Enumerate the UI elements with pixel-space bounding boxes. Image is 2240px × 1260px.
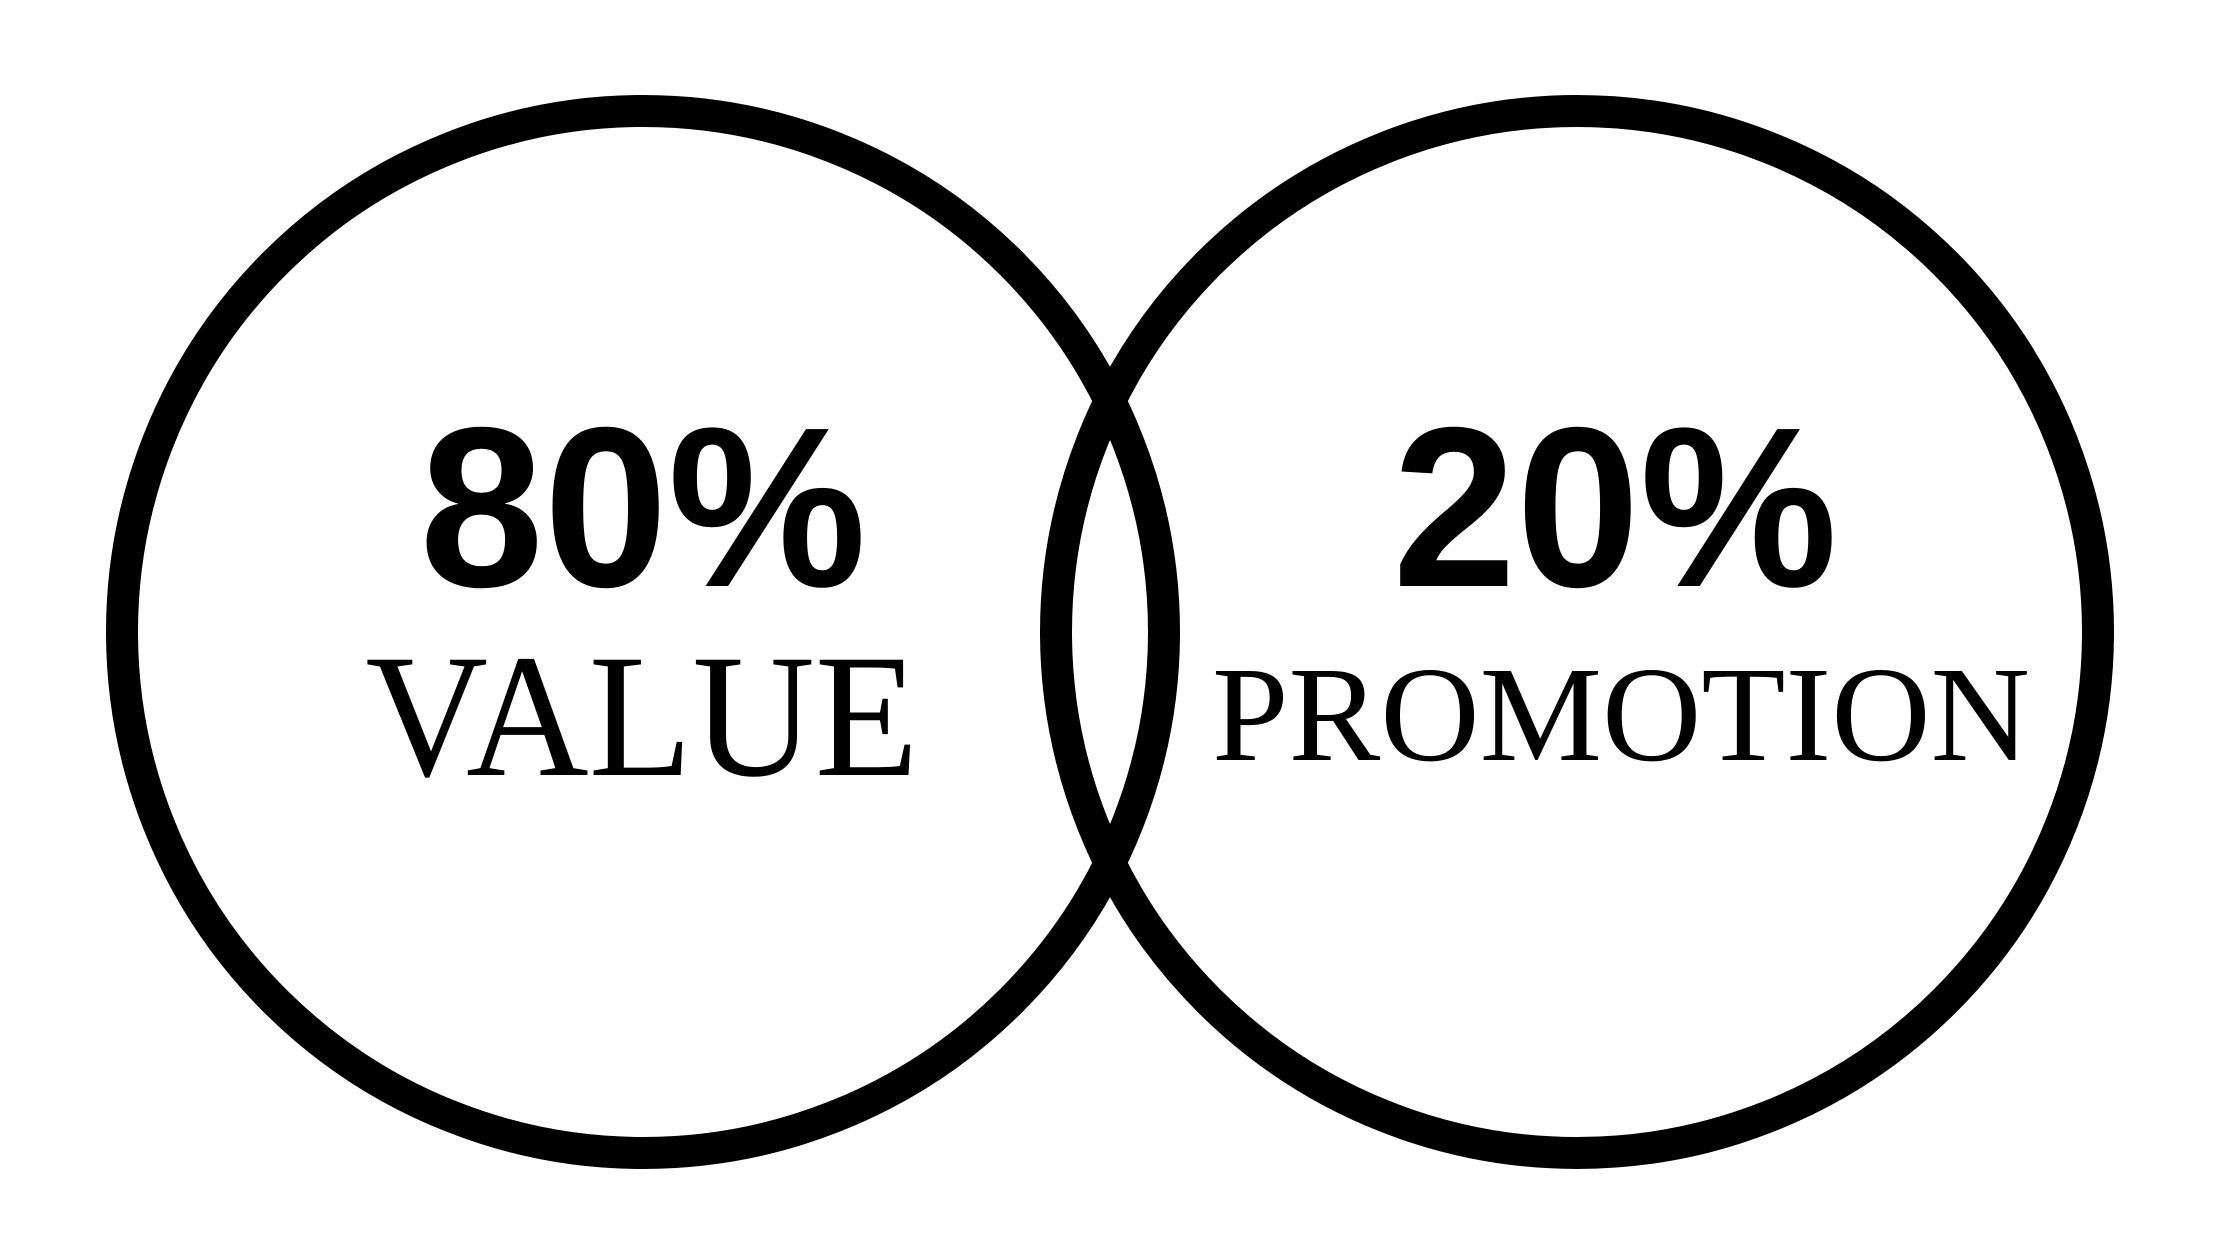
circle: value: [122, 111, 1164, 1153]
text: PROMOTION: PROMOTION: [1212, 640, 2030, 790]
group: promotion label: [1212, 381, 2030, 790]
heading: 80%: 80%: [420, 381, 866, 635]
group: value label: [366, 381, 918, 814]
text: VALUE: VALUE: [366, 619, 918, 814]
heading: 20%: 20%: [1392, 381, 1838, 635]
circle: promotion: [1056, 111, 2098, 1153]
